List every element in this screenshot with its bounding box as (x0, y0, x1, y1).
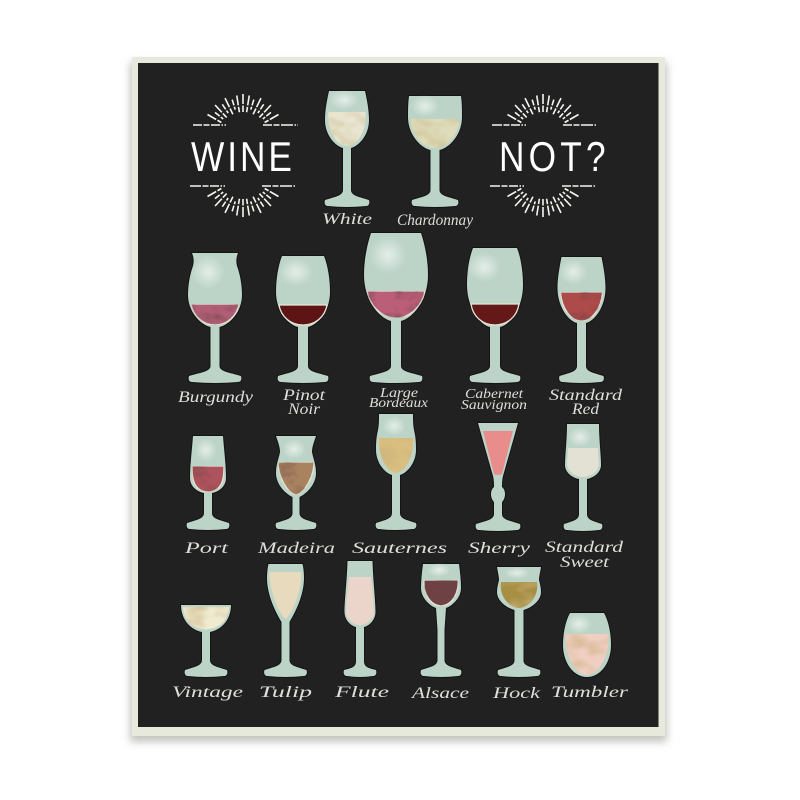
glass: Flute (333, 561, 389, 701)
label: Standard Red: Red (571, 401, 600, 418)
heading: NOT?: NOT? (499, 134, 610, 181)
label: Cabernet Sauvignon: Cabernet (465, 387, 524, 402)
label: Tulip: Tulip (259, 684, 312, 701)
glass: Sherry (468, 423, 531, 557)
canvas frame (132, 57, 665, 736)
label: Hock: Hock (492, 685, 541, 702)
label: Standard Red: Standard (549, 387, 623, 404)
label: Vintage: Vintage (172, 684, 243, 701)
glass: Cabernet Sauvignon (461, 248, 527, 413)
glass: Tulip (259, 564, 312, 701)
glass: Standard Red (549, 257, 623, 418)
glass: Pinot Noir (276, 256, 330, 418)
glass: Burgundy (178, 253, 254, 406)
glass: Madeira (257, 436, 335, 557)
label: Large Bordeaux: Large (379, 386, 418, 401)
label: White: White (322, 211, 372, 228)
dark poster panel (138, 63, 658, 727)
label: Sauternes: Sauternes (352, 540, 447, 557)
label: Alsace: Alsace (411, 685, 469, 702)
label: Chardonnay: Chardonnay (397, 212, 474, 229)
sunburst top (207, 94, 279, 122)
glass: White (322, 90, 372, 228)
glass: Alsace (411, 563, 469, 702)
glass: Port (183, 436, 229, 557)
label: Burgundy: Burgundy (178, 389, 254, 406)
heading: WINE: WINE (191, 134, 295, 181)
glass: Large Bordeaux (364, 233, 429, 411)
title block: NOT? (490, 94, 610, 217)
frame shadow (130, 62, 667, 742)
label: Sherry: Sherry (468, 540, 531, 557)
glass: Standard Sweet (545, 424, 624, 571)
label: Tumbler: Tumbler (551, 684, 629, 701)
glass: Sauternes (352, 414, 447, 557)
glass: Vintage (172, 605, 243, 701)
label: Port: Port (183, 540, 229, 557)
label: Standard Sweet: Sweet (560, 554, 610, 571)
glass: Tumbler (551, 613, 629, 701)
label: Large Bordeaux: Bordeaux (369, 396, 429, 411)
label: Pinot Noir: Pinot (282, 387, 326, 404)
glass: Chardonnay (397, 95, 474, 229)
label: Flute: Flute (333, 684, 389, 701)
label: Standard Sweet: Standard (545, 539, 624, 556)
title block: WINE (190, 94, 298, 217)
label: Cabernet Sauvignon: Sauvignon (461, 398, 527, 413)
glass: Hock (492, 567, 541, 702)
label: Pinot Noir: Noir (287, 401, 321, 418)
label: Madeira: Madeira (257, 540, 335, 557)
